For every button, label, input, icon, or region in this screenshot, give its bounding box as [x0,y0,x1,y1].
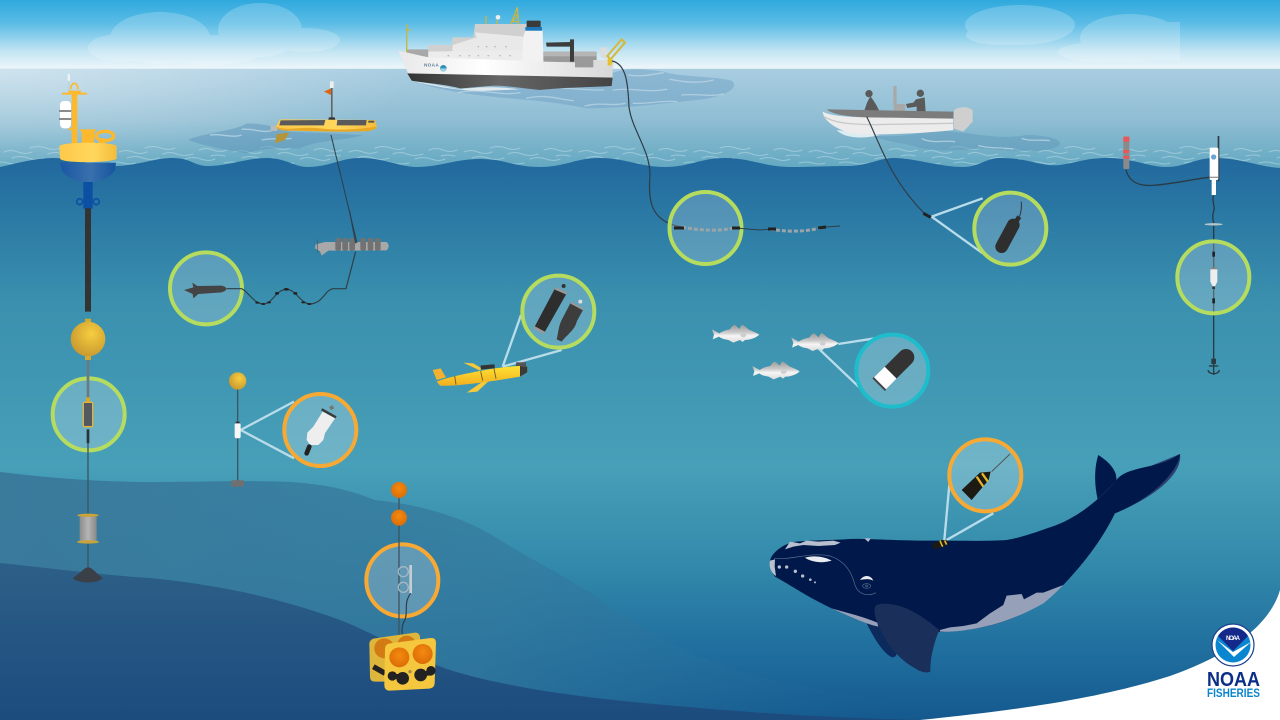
fish three [752,361,800,379]
crane [546,39,574,62]
buoy tower [62,83,114,146]
leader lines [241,402,294,458]
glider body [433,362,527,393]
hull [398,51,613,91]
panel: moored buoy [59,74,117,312]
people [862,90,926,117]
hull: NOAA [424,63,439,68]
panel: research ship [398,7,734,108]
drone hull [271,119,377,132]
body [770,454,1180,632]
towed array and sensor [170,210,389,324]
sensor circle [522,276,594,348]
anchor weight [73,567,103,583]
panel: glider [433,276,594,393]
line and floats [391,482,407,642]
mooring line [86,360,90,568]
sky [0,0,1280,69]
a-frame [593,39,625,68]
callosities [770,538,873,583]
sensor canister [59,74,71,128]
rear deck [407,49,597,68]
panel: surface mooring right [1123,136,1249,375]
boat wake [870,131,1060,151]
sensor circle [170,252,242,324]
tag circle [949,439,1021,511]
ocean water [0,158,1280,720]
hull [823,107,973,138]
sea surface [0,68,1280,173]
anchor [1208,359,1219,375]
leader lines [818,338,875,387]
teal sensor circle [856,335,928,407]
logo: NOAA Fisheries [1207,624,1260,700]
marker buoy [1123,137,1129,169]
funnel [522,21,543,62]
panel: benthic lander [366,482,438,691]
acoustic release [398,565,412,640]
line [229,372,246,487]
white sensor [235,422,241,438]
mouth line [774,555,876,595]
disk [1205,223,1223,225]
towed body [315,238,389,256]
panel: ship cable sensor [670,192,840,264]
orange circle [366,544,438,616]
drone keel [275,133,289,143]
sensor circle [670,192,742,264]
fish two [791,333,839,351]
lower line [1213,196,1214,362]
rear flipper [867,623,897,657]
rear frame [369,633,420,682]
tag on whale [932,540,948,549]
mast and flag [324,81,336,122]
superstructure [428,24,527,62]
fish one [712,325,759,343]
upper saildrone cable [331,135,357,243]
fluke back lobe [1095,455,1117,502]
ship cable and towed line sensor [612,61,682,227]
panel: small boat [823,86,1060,265]
leader lines [944,485,993,540]
cable [867,117,931,217]
masts [407,7,519,53]
sensor circle [1177,241,1249,313]
front flipper [874,604,939,672]
panel: saildrone [188,81,377,153]
current meter [83,402,93,427]
clouds right [965,5,1180,62]
seabed front layer [0,563,920,720]
panel: small bottom mooring [229,372,356,487]
console [893,86,905,118]
towed sensor string [674,226,840,231]
subtitle: FISHERIES [1207,686,1260,700]
whitecaps [0,146,1280,164]
white corner [920,590,1280,720]
drone wake [188,123,363,153]
connecting cable [1126,170,1210,186]
leader lines [932,198,983,253]
green sensor circle [53,378,125,450]
buoy float [59,143,117,183]
orange circle with bottle sensor [284,394,356,466]
surface unit [1210,136,1219,195]
sensor circle [974,193,1046,265]
panel: fish [712,325,928,407]
wordmark: NOAA [1207,669,1260,691]
noaa seal: NOAA [1226,636,1241,642]
seabed back layer [0,472,920,720]
panel: right whale [770,439,1180,672]
ship wake [420,69,734,108]
tow cable [227,210,356,305]
belly patch [832,585,1063,632]
back shade [1057,454,1180,525]
clouds left [88,3,340,65]
buoy neck [77,182,99,312]
subsurface float [71,319,105,360]
leader lines [503,315,562,367]
mooring line with float and sensors [53,319,125,583]
front frame [384,638,436,691]
release spool [77,514,99,544]
